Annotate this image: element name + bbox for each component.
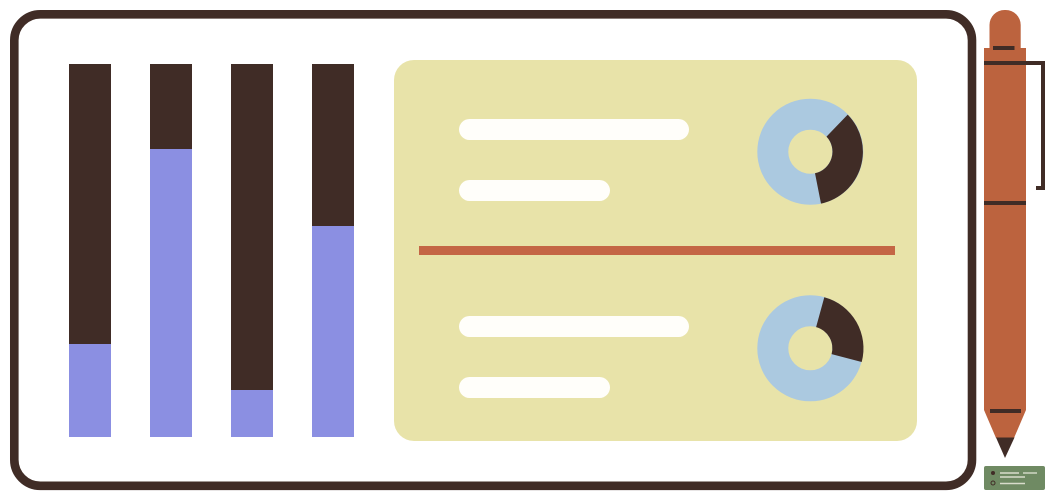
badge: green label bbox=[984, 466, 1045, 490]
pen clip bbox=[1000, 63, 1043, 188]
panel: summary card bbox=[394, 60, 917, 441]
icon: pen bbox=[984, 10, 1043, 458]
donut chart: top bbox=[773, 114, 863, 204]
text placeholder: bottom short line bbox=[459, 377, 610, 398]
pen cap bbox=[990, 10, 1021, 50]
text placeholder: bottom long line bbox=[459, 316, 689, 337]
text placeholder: top short line bbox=[459, 180, 610, 201]
pen tip bbox=[996, 438, 1014, 458]
bar 3 bbox=[231, 64, 273, 437]
bar chart bbox=[69, 64, 354, 437]
bar 2 bbox=[150, 64, 192, 437]
pen bands bbox=[984, 46, 1026, 413]
bar 4 bbox=[312, 64, 354, 437]
badge lines bbox=[1000, 473, 1037, 484]
divider line bbox=[419, 246, 895, 255]
bar 1 bbox=[69, 64, 111, 437]
text placeholder: top long line bbox=[459, 119, 689, 140]
badge icons bbox=[991, 471, 995, 485]
donut chart: bottom bbox=[773, 297, 863, 386]
pen body bbox=[984, 48, 1026, 438]
